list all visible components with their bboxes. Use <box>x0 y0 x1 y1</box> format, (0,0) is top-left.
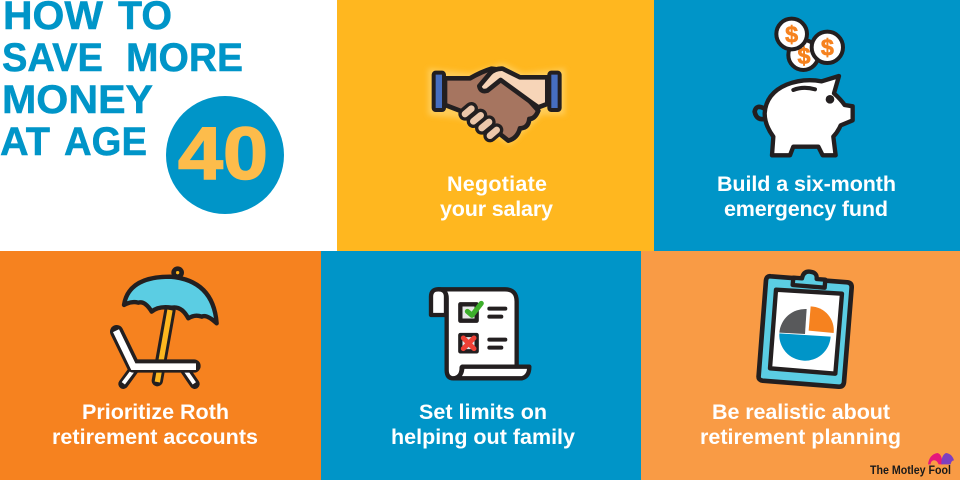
heading: MONEY <box>2 78 153 122</box>
label <box>440 172 553 221</box>
label: Negotiate <box>447 172 547 196</box>
label: Build a six-month <box>717 172 896 196</box>
icon: jester hat <box>928 453 954 464</box>
label: emergency fund <box>724 197 888 221</box>
panel: emergency fund <box>654 0 960 251</box>
badge: age 40: 40 <box>178 112 268 195</box>
label <box>700 400 901 449</box>
logo: The Motley Fool <box>870 453 954 477</box>
badge: age 40 <box>166 96 284 214</box>
label: Set limits on <box>419 400 547 424</box>
label: your salary <box>440 197 553 221</box>
heading: AGE <box>64 120 147 164</box>
heading <box>0 0 243 164</box>
label: helping out family <box>391 425 575 449</box>
panel: realistic planning <box>641 251 960 480</box>
logo: The Motley Fool: The Motley Fool <box>870 465 951 477</box>
panel: roth accounts <box>0 251 321 480</box>
label: Prioritize Roth <box>82 400 229 424</box>
label: Be realistic about <box>712 400 890 424</box>
heading: SAVE <box>2 36 103 80</box>
label <box>391 400 575 449</box>
label: retirement accounts <box>52 425 258 449</box>
coins <box>776 19 843 70</box>
label <box>717 172 896 221</box>
icon: beach umbrella and lounge chair <box>116 269 217 384</box>
panel: limits on family <box>321 251 641 480</box>
panel: negotiate your salary <box>337 0 654 251</box>
icon: clipboard with pie chart <box>759 272 852 387</box>
heading: MORE <box>126 36 243 80</box>
panel: title <box>0 0 337 251</box>
icon: checklist scroll <box>431 289 529 378</box>
icon: handshake <box>428 63 565 145</box>
coins: $ <box>785 21 798 47</box>
label: retirement planning <box>700 425 901 449</box>
coins: $ <box>798 43 811 69</box>
label <box>52 400 258 449</box>
icon: piggy bank with coins <box>755 19 853 155</box>
heading: AT <box>0 120 50 164</box>
coins: $ <box>821 35 834 61</box>
